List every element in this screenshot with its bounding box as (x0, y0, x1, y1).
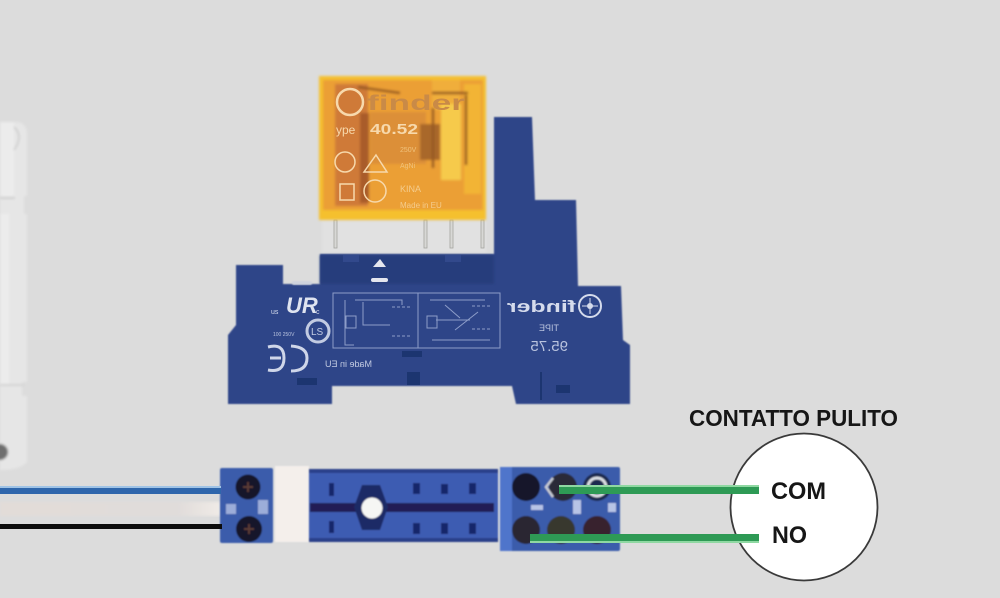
socket mirrored logo: LS (311, 327, 324, 338)
relay markings (335, 89, 465, 210)
screws (236, 474, 260, 500)
socket holes (329, 483, 476, 534)
terminal labels (226, 504, 236, 514)
relay body (319, 76, 486, 220)
socket: blue finder 95.75 side view (228, 117, 630, 404)
relay pins (334, 220, 484, 248)
terminal block: right (500, 467, 620, 551)
pale band behind wires (0, 502, 222, 516)
wire: blue (0, 486, 221, 494)
socket mirrored logo: us (271, 309, 279, 316)
relay pin backdrop (322, 220, 486, 253)
relay markings: KINA (400, 184, 421, 194)
wire: green COM (559, 485, 759, 494)
socket mirrored logo: finder (506, 297, 576, 316)
relay markings: 40.52 (370, 121, 418, 138)
socket mirrored logo: 100 250V (273, 332, 295, 338)
socket body (228, 117, 630, 404)
socket top slots (343, 255, 359, 262)
relay: orange finder relay (319, 76, 486, 253)
socket arrow marks (373, 259, 386, 267)
socket mirrored logo: UR (286, 293, 318, 318)
label: NO: NO (772, 522, 807, 549)
socket mirrored logo (268, 293, 601, 371)
socket highlight (292, 281, 312, 285)
socket underside: centre (309, 469, 498, 542)
relay markings: 250V (400, 147, 417, 154)
socket mirrored logo: c (316, 309, 320, 316)
wire: black (0, 524, 222, 529)
label: COM: COM (771, 478, 826, 505)
relay markings: AgNi (400, 163, 416, 170)
white gap between terminals (275, 466, 309, 542)
socket mirrored logo: 95.75 (530, 338, 568, 355)
socket wiring diagram (333, 293, 500, 348)
socket mirrored logo: TIPE (539, 323, 559, 333)
screws (512, 473, 540, 501)
socket latch detail (297, 351, 570, 400)
relay markings: ype (336, 123, 356, 137)
circle: clean contact (730, 434, 878, 580)
wire: green NO (530, 534, 759, 543)
terminal block: left (220, 468, 273, 543)
relay markings: Made in EU (400, 201, 442, 210)
relay markings: finder (367, 92, 465, 115)
socket mirrored logo: Made in EU (325, 359, 372, 369)
device: white din-rail module at left edge (0, 122, 27, 470)
heading: contatto pulito: CONTATTO PULITO (689, 405, 898, 431)
